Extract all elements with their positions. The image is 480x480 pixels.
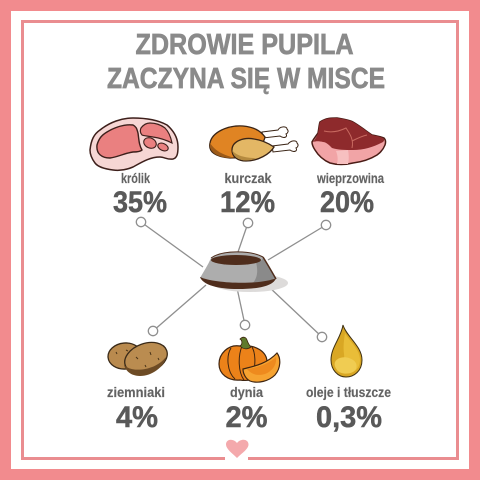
icon: chicken leg xyxy=(210,126,298,161)
label: królik xyxy=(121,171,150,186)
icon: heart on frame xyxy=(225,440,248,462)
icon: potatoes xyxy=(107,337,172,379)
connectors: lines from bowl to ingredients xyxy=(141,222,326,337)
icon: bowl xyxy=(200,252,288,292)
percentage: 4% xyxy=(116,401,158,434)
label: dynia xyxy=(230,385,263,400)
ingredient: królik xyxy=(90,118,178,219)
label: kurczak xyxy=(224,171,272,186)
connector end circles xyxy=(136,217,331,342)
icon: rabbit meat xyxy=(90,118,178,170)
ingredient: ziemniaki xyxy=(107,337,172,434)
ingredient: kurczak xyxy=(210,126,298,219)
title: ZDROWIE PUPILA xyxy=(136,29,354,61)
percentage: 20% xyxy=(320,186,374,219)
percentage: 2% xyxy=(226,401,268,434)
ingredient: oleje i tłuszcze xyxy=(306,325,391,434)
ingredient: wieprzowina xyxy=(312,118,386,219)
icon: pork steak xyxy=(312,118,386,164)
percentage: 0,3% xyxy=(316,401,382,434)
title: ZACZYNA SIĘ W MISCE xyxy=(107,63,385,95)
icon: pumpkin xyxy=(219,337,280,382)
label: ziemniaki xyxy=(107,385,165,400)
label: wieprzowina xyxy=(316,171,384,186)
ingredient: dynia xyxy=(219,337,280,434)
icon: oil drop xyxy=(331,325,362,377)
percentage: 12% xyxy=(220,186,275,219)
percentage: 35% xyxy=(113,186,167,219)
title xyxy=(107,29,385,95)
label: oleje i tłuszcze xyxy=(306,385,391,400)
